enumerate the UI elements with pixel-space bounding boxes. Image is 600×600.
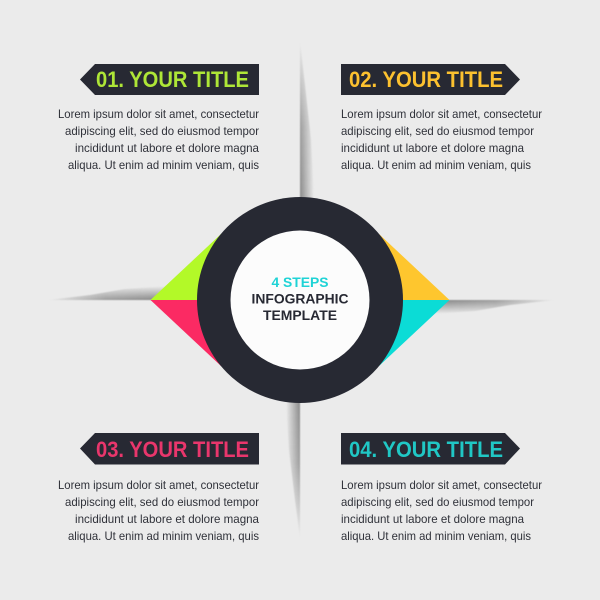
centre label: infographic: INFOGRAPHIC bbox=[252, 292, 349, 307]
heading: step 01: 01. YOUR TITLE bbox=[96, 67, 249, 92]
shadow divider: left bbox=[58, 287, 164, 301]
triangle: yellow bbox=[368, 234, 450, 300]
text block: step 04: incididunt ut labore et dolore magna bbox=[341, 512, 524, 526]
text block: step 03 bbox=[58, 478, 259, 543]
banner: step 04 bbox=[341, 433, 520, 464]
heading: step 03: 03. YOUR TITLE bbox=[96, 437, 249, 462]
text block: step 02 bbox=[341, 107, 542, 172]
text block: step 01: Lorem ipsum dolor sit amet, consectetur bbox=[58, 107, 259, 121]
text block: step 04: adipiscing elit, sed do eiusmod tempor bbox=[341, 495, 534, 509]
text block: step 02: aliqua. Ut enim ad minim veniam, quis bbox=[341, 158, 531, 172]
panel: step 01 bbox=[58, 64, 259, 172]
text block: step 01: incididunt ut labore et dolore magna bbox=[75, 141, 259, 155]
heading: step 04: 04. YOUR TITLE bbox=[349, 437, 503, 462]
centre text bbox=[252, 275, 349, 323]
text block: step 04: aliqua. Ut enim ad minim veniam, quis bbox=[341, 529, 531, 543]
text block: step 04 bbox=[341, 478, 542, 543]
text block: step 03: adipiscing elit, sed do eiusmod tempor bbox=[65, 495, 259, 509]
central diagram bbox=[150, 197, 450, 403]
panel: step 02 bbox=[341, 64, 542, 172]
text block: step 03: Lorem ipsum dolor sit amet, consectetur bbox=[58, 478, 259, 492]
text block: step 02: Lorem ipsum dolor sit amet, consectetur bbox=[341, 107, 542, 121]
text block: step 03: incididunt ut labore et dolore magna bbox=[75, 512, 259, 526]
heading: step 02: 02. YOUR TITLE bbox=[349, 67, 503, 92]
white centre disc bbox=[230, 230, 370, 370]
panel: step 04 bbox=[341, 433, 542, 543]
text block: step 01: adipiscing elit, sed do eiusmod tempor bbox=[65, 124, 259, 138]
shadow divider: right bbox=[436, 300, 545, 313]
banner: step 01 bbox=[80, 64, 259, 95]
shadow divider: bottom bbox=[286, 400, 300, 538]
text block: step 03: aliqua. Ut enim ad minim veniam, quis bbox=[68, 529, 259, 543]
text block: step 01 bbox=[58, 107, 259, 172]
panel: step 03 bbox=[58, 433, 259, 543]
text block: step 01: aliqua. Ut enim ad minim veniam, quis bbox=[68, 158, 259, 172]
triangle: lime bbox=[150, 234, 232, 300]
centre label: 4 steps: 4 STEPS bbox=[272, 275, 328, 290]
text block: step 04: Lorem ipsum dolor sit amet, consectetur bbox=[341, 478, 542, 492]
shadow divider: top bbox=[300, 53, 313, 198]
triangle: pink bbox=[150, 300, 232, 366]
centre label: template: TEMPLATE bbox=[263, 308, 337, 323]
text block: step 02: adipiscing elit, sed do eiusmod tempor bbox=[341, 124, 534, 138]
banner: step 02 bbox=[341, 64, 520, 95]
dark ring bbox=[197, 197, 403, 403]
banner: step 03 bbox=[80, 433, 259, 464]
triangle: cyan bbox=[368, 300, 450, 366]
text block: step 02: incididunt ut labore et dolore magna bbox=[341, 141, 524, 155]
